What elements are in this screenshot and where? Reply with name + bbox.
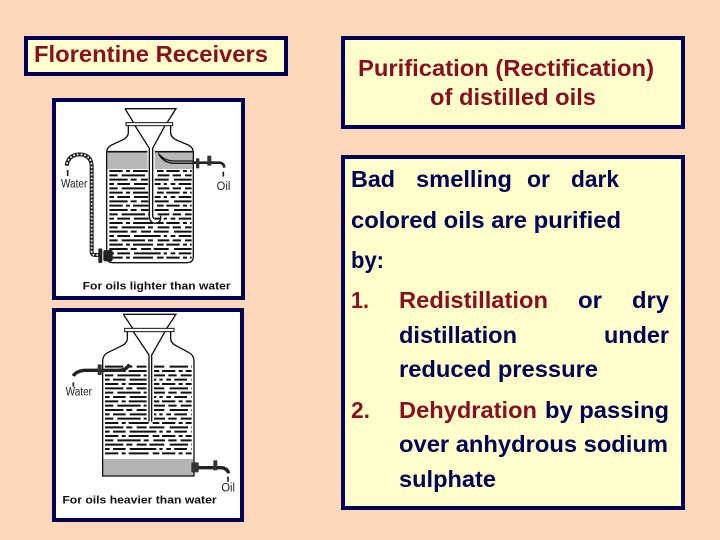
water outlet tap [73, 364, 129, 376]
oil layer [107, 152, 193, 169]
panel: Purification heading: of distilled oils [430, 84, 596, 110]
panel: Purification heading [343, 38, 683, 127]
panel: diagram for oils lighter than water: For oils lighter than water [83, 280, 231, 292]
method 1: redistillation: or [578, 287, 602, 313]
intro text: smelling [416, 166, 512, 192]
panel: diagram for oils heavier than water [54, 310, 242, 520]
method 1: redistillation: 1. [351, 287, 369, 313]
method 1: redistillation: Redistillation [399, 287, 548, 313]
panel: Florentine Receivers title [26, 38, 286, 74]
method 2: dehydration: Dehydration [399, 397, 537, 423]
bottle [103, 332, 194, 476]
labels: Water [66, 385, 92, 399]
oil outlet tap [158, 153, 193, 163]
water hatching [105, 367, 192, 453]
panel: diagram for oils lighter than water: Oil [217, 179, 230, 193]
method 2: dehydration: 2. [351, 397, 370, 423]
panel: diagram for oils lighter than water [54, 100, 243, 298]
method 1: redistillation: dry [632, 287, 669, 313]
panel: Florentine Receivers title: Florentine Receivers [34, 41, 268, 67]
intro text: Bad [351, 166, 395, 192]
method 1: redistillation: distillation [399, 322, 517, 348]
intro text: dark [571, 166, 619, 192]
oil layer [103, 459, 193, 476]
method 1: redistillation: under [604, 322, 669, 348]
method 2: dehydration: sulphate [399, 466, 496, 492]
oil outlet tap [192, 468, 229, 473]
funnel and tube [147, 150, 157, 221]
method 2: dehydration: over anhydrous sodium [399, 431, 668, 457]
labels: Water [61, 176, 87, 190]
bottle [107, 126, 193, 263]
method 2: dehydration [351, 397, 669, 492]
method 1: redistillation [351, 287, 669, 382]
method 1: redistillation: reduced pressure [399, 356, 598, 382]
water hatching [109, 171, 192, 258]
intro text: by: [351, 247, 384, 273]
intro text [351, 166, 621, 273]
intro text: or [527, 166, 550, 192]
panel: diagram for oils heavier than water: For oils heavier than water [62, 494, 217, 506]
panel: purification methods text [343, 157, 683, 508]
funnel and tube [147, 355, 154, 422]
panel: Purification heading: Purification (Rectification) [358, 55, 654, 81]
panel: diagram for oils heavier than water: Oil [221, 481, 235, 495]
intro text: colored oils are purified [351, 207, 621, 233]
method 2: dehydration: by passing [545, 397, 669, 423]
water hose [67, 154, 102, 255]
